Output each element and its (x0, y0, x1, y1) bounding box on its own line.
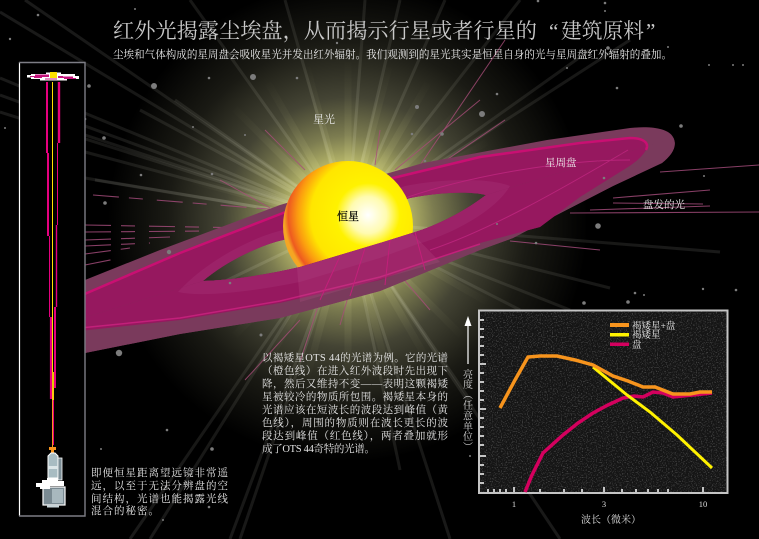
fan of short rays around star (193, 62, 487, 382)
icon: space telescope (36, 453, 65, 508)
title: 建筑原料 (561, 19, 644, 43)
title: ” (646, 19, 655, 43)
legend (610, 320, 676, 351)
x axis title: 波长（微米） (581, 513, 641, 526)
label: circumstellar disc: 星周盘 (545, 156, 577, 169)
legend: 褐矮星 (632, 329, 661, 341)
title: 红外光揭露尘埃盘，从而揭示行星或者行星的 (113, 19, 537, 44)
text block: OTS 44 explanation (262, 351, 448, 455)
caption: telescope (91, 466, 228, 517)
caption: telescope: 混合的秘密。 (91, 504, 159, 517)
curve: disc (525, 392, 712, 492)
text block: OTS 44 explanation: 降，然后又维持不变——表明这颗褐矮 (262, 377, 448, 390)
curve: brown dwarf (593, 367, 712, 468)
text block: OTS 44 explanation: 成了OTS 44奇特的光谱。 (262, 442, 375, 455)
arrow into telescope (49, 447, 56, 453)
caption: telescope: 远，以至于无法分辨盘的空 (91, 479, 228, 492)
label: starlight: 星光 (313, 112, 335, 126)
starlight glow (108, 0, 588, 462)
x axis tick labels: 1 (512, 499, 516, 509)
arrow: brightness axis (464, 316, 472, 364)
x axis tick labels: 3 (602, 499, 606, 509)
y axis title: 亮度（任意单位） (460, 369, 472, 452)
chart: spectrum (478, 310, 728, 493)
circumstellar disc, rear (80, 127, 675, 354)
text block: OTS 44 explanation: 星被较冷的物质所包围。褐矮星本身的 (262, 390, 448, 403)
text block: OTS 44 explanation: （橙色线）在进入红外波段时先出现下 (262, 364, 448, 377)
legend: 褐矮星+盘 (632, 320, 676, 332)
circumstellar disc, front (80, 127, 675, 354)
legend: 盘 (632, 339, 642, 351)
subtitle: 尘埃和气体构成的星周盘会吸收星光并发出红外辐射。我们观测到的星光其实是恒星自身的光与星周盘红外辐射的叠加。 (113, 47, 672, 61)
title: “ (549, 19, 558, 43)
text block: OTS 44 explanation: 以褐矮星OTS 44的光谱为例。它的光谱 (262, 351, 448, 364)
text block: OTS 44 explanation: 色线），周围的物质则在波长更长的波 (262, 416, 448, 429)
text block: OTS 44 explanation: 段达到峰值（红色线），两者叠加就形 (262, 429, 448, 442)
disc emitted light, right (510, 165, 759, 250)
panel: telescope view (19, 62, 85, 516)
disc emitted light, left (85, 195, 280, 265)
label: star: 恒星 (337, 209, 359, 223)
light beams (47, 82, 59, 447)
x axis tick labels: 10 (699, 499, 707, 509)
text block: OTS 44 explanation: 光谱应该在短波长的波段达到峰值（黄 (262, 403, 448, 416)
curve: brown dwarf plus disc (500, 356, 712, 408)
label: disc light: 盘发的光 (643, 198, 685, 211)
pink disc rays (220, 40, 505, 380)
chart ticks (480, 320, 703, 492)
icon: miniature disc and star (27, 72, 79, 80)
x axis tick labels (512, 499, 707, 509)
star (283, 161, 413, 291)
caption: telescope: 间结构，光谱也能揭露光线 (91, 492, 228, 505)
caption: telescope: 即便恒星距离望远镜非常遥 (91, 466, 228, 479)
